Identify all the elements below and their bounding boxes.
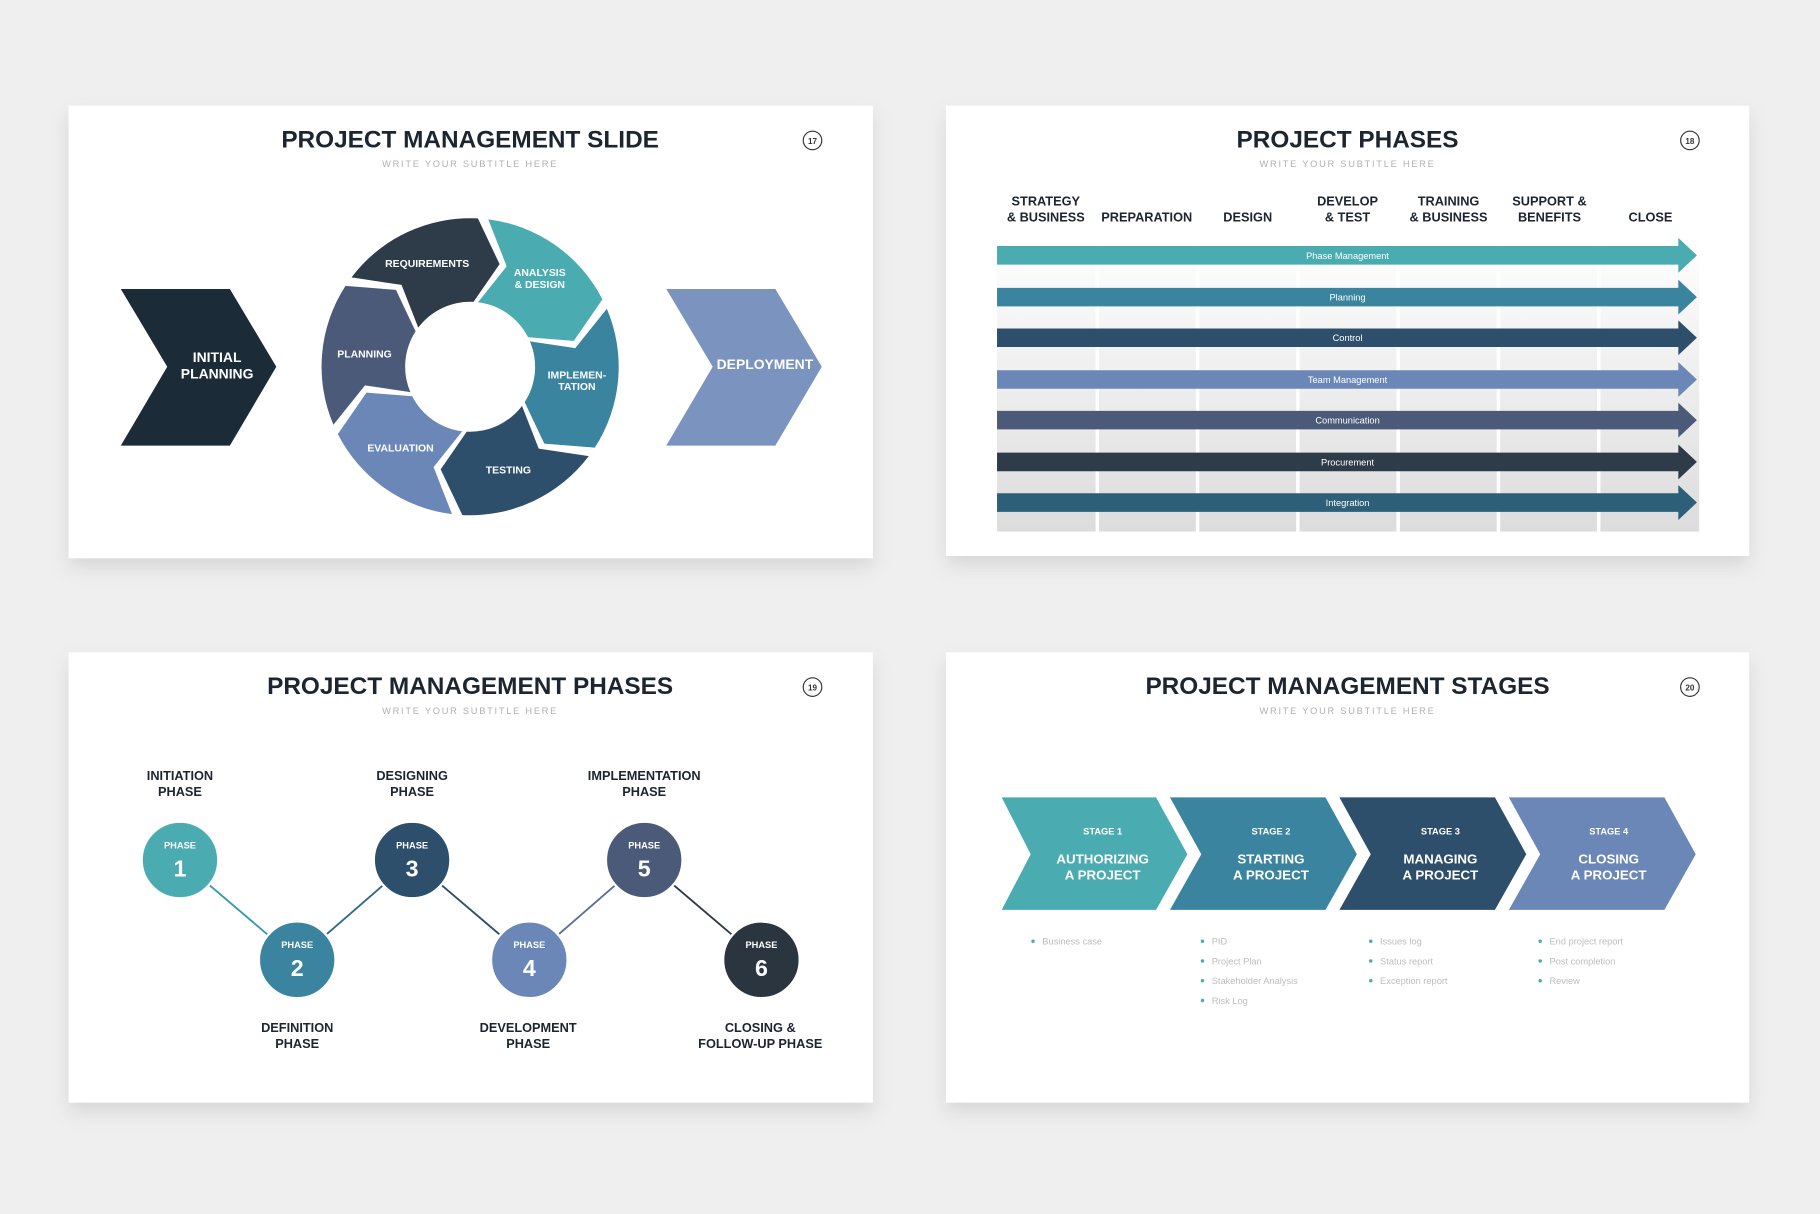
stage 2 chevron: A PROJECT [1233,868,1309,883]
arrow: communication [997,403,1697,438]
column headers: & BUSINESS [1410,210,1487,225]
bullet lists: Risk Log [1212,996,1248,1006]
column headers: DESIGN [1223,210,1272,225]
bullet lists: Exception report [1380,976,1448,986]
segment: evaluation [338,393,462,514]
page number [1681,678,1699,696]
arrow: control [997,320,1697,355]
page number [803,131,822,150]
stage 1 chevron [1002,797,1187,910]
phase labels: PHASE [390,784,434,799]
stage 1 chevron: AUTHORIZING [1056,851,1149,866]
phase 5: PHASE [628,840,660,850]
page number: 17 [808,137,818,146]
segment: implementation: TATION [558,382,596,393]
phase 3 [374,822,450,898]
page number [803,678,822,696]
panel: project management stages [946,652,1749,1103]
phase labels: INITIATION [147,768,213,783]
phase 1: 1 [174,855,187,881]
bullet lists: Review [1549,976,1580,986]
column headers: BENEFITS [1518,210,1581,225]
bullet lists: Issues log [1380,937,1422,947]
phase labels: PHASE [506,1036,550,1051]
title: PROJECT PHASES [1237,126,1459,153]
grid [997,238,1699,532]
phase 6: 6 [755,955,768,981]
phase 1 [142,822,218,898]
phase 6: PHASE [745,940,777,950]
phase labels: DESIGNING [376,768,448,783]
phase 5: 5 [638,855,651,881]
segment: implementation [525,309,619,448]
subtitle: WRITE YOUR SUBTITLE HERE [1260,706,1436,716]
phase labels: CLOSING & [725,1020,796,1035]
arrow: team management: Team Management [1308,375,1388,385]
phase 2 [259,922,335,998]
segment: testing [441,406,589,515]
bullet lists: Business case [1042,937,1102,947]
phase 3: PHASE [396,840,428,850]
arrows [997,238,1697,520]
arrow: phase management [997,238,1697,273]
bullet lists [1031,937,1624,1006]
segment: implementation: IMPLEMEN- [548,370,607,381]
bullet lists: Post completion [1549,956,1615,966]
phase 6 [723,922,800,998]
arrow: team management [997,362,1697,397]
segment: testing: TESTING [486,466,531,477]
phase labels: PHASE [158,784,202,799]
page number [1681,131,1699,150]
title: PROJECT MANAGEMENT STAGES [1145,673,1550,700]
title: PROJECT MANAGEMENT PHASES [267,673,673,700]
arrow: integration: Integration [1326,498,1369,508]
subtitle: WRITE YOUR SUBTITLE HERE [382,159,558,169]
phase 1: PHASE [164,840,196,850]
stage 3 chevron: A PROJECT [1403,868,1478,883]
stage 1 chevron: STAGE 1 [1083,826,1122,836]
title: PROJECT MANAGEMENT SLIDE [281,126,659,153]
column headers: TRAINING [1418,193,1479,208]
phase 4: PHASE [513,940,545,950]
arrow: planning: Planning [1330,293,1366,303]
panel: project management phases [69,652,873,1103]
arrow: procurement: Procurement [1321,457,1374,467]
page number: 18 [1685,137,1695,146]
segment: requirements [352,218,500,328]
stage 4 chevron [1509,797,1696,910]
segment: planning: PLANNING [337,349,392,360]
segment: planning [322,286,416,425]
arrow: phase management: Phase Management [1306,251,1389,261]
stage 4 chevron: CLOSING [1578,851,1639,866]
bullet lists: PID [1212,937,1228,947]
subtitle: WRITE YOUR SUBTITLE HERE [1260,159,1436,169]
page number: 20 [1685,684,1695,693]
stage 4 chevron: A PROJECT [1571,868,1647,883]
column headers: PREPARATION [1101,210,1192,225]
stage 3 chevron: STAGE 3 [1421,826,1460,836]
column headers: & BUSINESS [1007,210,1085,225]
phase 2: 2 [291,955,304,981]
bullet lists: Project Plan [1212,956,1262,966]
phase labels: FOLLOW-UP PHASE [698,1036,822,1051]
column headers: DEVELOP [1317,193,1379,208]
panel: project management slide [69,106,873,558]
bullet lists: End project report [1549,937,1624,947]
chevron: initial planning [121,289,276,446]
segment: evaluation: EVALUATION [367,443,434,454]
phase labels: DEFINITION [261,1020,333,1035]
arrow: procurement [997,445,1697,479]
segment: analysis: ANALYSIS [514,268,566,279]
column headers: & TEST [1325,210,1370,225]
chevron: deployment [666,289,822,446]
phase 5 [606,822,683,898]
page number: 19 [808,684,818,693]
phase circles [142,822,800,998]
stage 2 chevron [1170,797,1357,910]
cycle diagram [322,218,619,515]
chevron: deployment: DEPLOYMENT [717,356,814,372]
connector lines [180,860,761,960]
phase 3: 3 [406,855,419,881]
arrow: planning [997,280,1697,315]
panel: project phases [946,106,1749,556]
column headers [1007,193,1672,225]
column headers: STRATEGY [1012,193,1081,208]
arrow: communication: Communication [1315,416,1380,426]
segment: analysis: & DESIGN [515,280,565,291]
phase 4 [491,922,568,998]
phase labels [147,768,822,1051]
arrow: control: Control [1333,333,1362,343]
segment: analysis [478,219,602,341]
phase labels: DEVELOPMENT [480,1020,577,1035]
phase labels: PHASE [622,784,666,799]
stage 3 chevron: MANAGING [1403,851,1477,866]
column headers: SUPPORT & [1512,193,1587,208]
chevron: initial planning: PLANNING [181,365,253,381]
arrow: integration [997,485,1697,520]
phase 2: PHASE [281,940,313,950]
phase 4: 4 [523,955,536,981]
stage 1 chevron: A PROJECT [1065,868,1141,883]
subtitle: WRITE YOUR SUBTITLE HERE [382,706,558,716]
stage 4 chevron: STAGE 4 [1589,826,1629,836]
segment: requirements: REQUIREMENTS [385,259,469,270]
stage 3 chevron [1339,797,1526,910]
stage 2 chevron: STAGE 2 [1251,826,1290,836]
phase labels: IMPLEMENTATION [588,768,701,783]
chevron: initial planning: INITIAL [193,349,242,365]
stage 2 chevron: STARTING [1237,851,1305,866]
phase labels: PHASE [275,1036,319,1051]
column headers: CLOSE [1629,210,1672,225]
bullet lists: Status report [1380,956,1434,966]
bullet lists: Stakeholder Analysis [1212,976,1298,986]
